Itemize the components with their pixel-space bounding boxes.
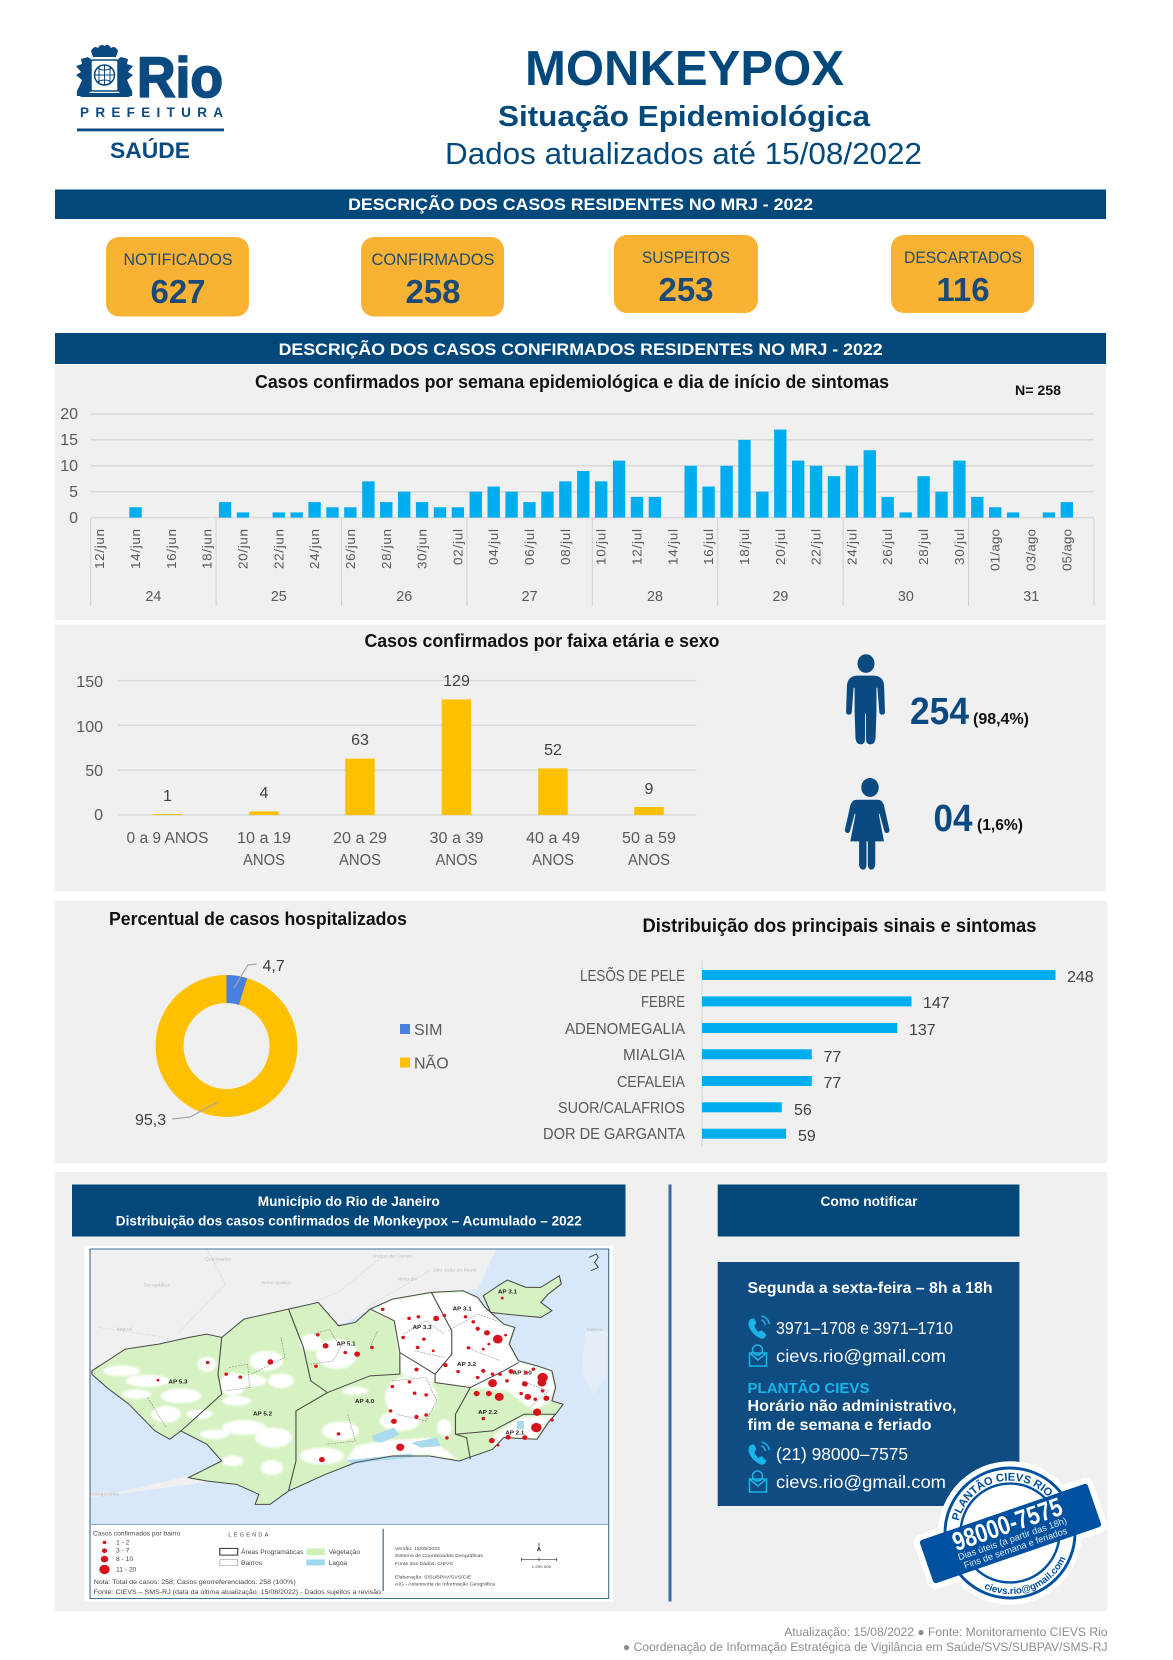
x axis day labels: 26/jun: [343, 529, 358, 569]
male count: 254: [910, 691, 969, 733]
category labels: 20 a 29: [333, 830, 387, 847]
panel: hospitalization and symptoms: [55, 901, 1107, 1163]
category labels: 0 a 9 ANOS: [126, 830, 208, 847]
stamp: plantão CIEVS: 98000-7575: [948, 1491, 1066, 1557]
map legend: Vegetação: [329, 1549, 361, 1556]
x axis day labels: 10/jul: [594, 529, 609, 565]
title: Situação Epidemiológica: [498, 101, 871, 133]
area labels: AP 3.1: [498, 1290, 518, 1296]
x axis week labels: 26: [396, 589, 412, 605]
stamp: plantão CIEVS: Fins de semana e feriados: [963, 1526, 1069, 1570]
area labels: AP 3.2: [457, 1362, 477, 1368]
value labels: 129: [443, 673, 470, 690]
map of Rio de Janeiro with case bubbles: Itaguaí: [117, 1327, 133, 1332]
footer: [623, 1625, 1108, 1654]
x axis week labels: 30: [898, 589, 914, 605]
icon: city crest: [76, 45, 133, 97]
category labels: ANOS: [628, 852, 670, 869]
donut chart: [135, 958, 285, 1129]
x axis week labels: 25: [271, 589, 287, 605]
category labels: 10 a 19: [237, 830, 291, 847]
x axis day labels: 14/jul: [665, 529, 680, 565]
map legend: Casos confirmados por bairro: [93, 1531, 181, 1538]
symptom values: 56: [794, 1102, 812, 1119]
y axis labels: 15: [60, 432, 78, 449]
y axis labels: 0: [94, 807, 103, 824]
card: notificados: NOTIFICADOS: [124, 250, 232, 269]
x axis day labels: 12/jul: [630, 529, 644, 565]
stamp: plantão CIEVS: cievs.rio@gmail.com: [984, 1557, 1066, 1594]
title: Dados atualizados até 15/08/2022: [445, 136, 922, 171]
icon: female figure: [845, 778, 889, 870]
bars: cases per day: [129, 430, 1073, 518]
footer: Atualização: 15/08/2022 ● Fonte: Monitoramento CIEVS Rio: [784, 1625, 1108, 1639]
donut legend: NÃO: [414, 1052, 449, 1072]
area labels: [168, 1290, 533, 1436]
sample size: N= 258: [1015, 382, 1061, 398]
card: notificados: 627: [150, 273, 206, 310]
heading: como notificar: [718, 1184, 1019, 1236]
x axis week labels: 24: [145, 589, 161, 605]
x axis day labels: 30/jun: [415, 529, 430, 569]
map legend: 3 - 7: [116, 1548, 130, 1555]
area labels: AP 2.1: [505, 1431, 525, 1436]
area labels: AP 5.2: [253, 1412, 273, 1417]
contact box: fim de semana e feriado: [748, 1417, 932, 1434]
value labels: 63: [351, 732, 369, 749]
card: suspeitos: SUSPEITOS: [642, 248, 730, 267]
heading: como notificar: Como notificar: [820, 1193, 918, 1209]
x axis day labels: 24/jun: [307, 529, 322, 569]
value labels: 4: [260, 785, 269, 802]
lagoons: [346, 1421, 524, 1464]
value labels: [163, 673, 654, 805]
office hours: Segunda a sexta-feira – 8h a 18h: [748, 1280, 992, 1297]
x axis day labels: 04/jul: [486, 529, 501, 565]
card: descartados: DESCARTADOS: [904, 248, 1022, 267]
plantão email: cievs.rio@gmail.com: [776, 1472, 946, 1492]
x axis day labels: 16/jun: [164, 529, 179, 569]
symptom values: [794, 969, 1094, 1145]
card: descartados: [891, 235, 1034, 313]
x axis day labels: 14/jun: [128, 529, 143, 569]
x axis day labels: 20/jul: [773, 529, 788, 565]
x axis day labels: 28/jun: [379, 529, 394, 569]
map of Rio de Janeiro with case bubbles: Queimados: [205, 1257, 232, 1263]
urban areas: [103, 1292, 555, 1475]
contact box: [718, 1262, 1019, 1506]
municipality base: [92, 1291, 563, 1504]
area labels: AP 5.1: [336, 1342, 356, 1347]
heading bar: casos confirmados: [55, 333, 1106, 364]
x axis day labels: [92, 529, 1074, 571]
card: descartados: 116: [936, 271, 990, 308]
programme area boundaries: [92, 1291, 563, 1504]
category labels: ANOS: [436, 852, 478, 869]
case bubbles: [156, 1297, 554, 1462]
title: MONKEYPOX: [525, 42, 844, 96]
wordmark Rio: Rio: [137, 46, 223, 110]
area labels: AP 3.3: [413, 1325, 432, 1331]
divider: [668, 1184, 672, 1602]
map of Rio de Janeiro with case bubbles: Duque de Caxias: [372, 1254, 413, 1259]
x axis day labels: 18/jul: [737, 529, 752, 565]
area labels: AP 2.2: [478, 1410, 498, 1416]
map of Rio de Janeiro with case bubbles: São João de Meriti: [433, 1268, 476, 1273]
map legend: Áreas Programáticas: [241, 1547, 303, 1556]
neighbourhood boundaries: [148, 1314, 548, 1444]
female count: 04: [934, 798, 972, 840]
donut legend: [400, 1022, 449, 1072]
plantão phone: (21) 98000–7575: [776, 1444, 908, 1464]
map legend: 8 - 10: [116, 1556, 134, 1563]
symptom labels: FEBRE: [641, 994, 685, 1011]
category labels: ANOS: [243, 852, 285, 869]
card: confirmados: [361, 237, 504, 316]
map legend: Lagoa: [329, 1560, 348, 1567]
x axis day labels: 30/jul: [952, 529, 967, 565]
category labels: 50 a 59: [622, 830, 676, 847]
card: confirmados: CONFIRMADOS: [372, 250, 494, 269]
chart title: hospitalized: Percentual de casos hospitalizados: [109, 908, 407, 929]
plantão heading: PLANTÃO CIEVS: [748, 1379, 870, 1397]
map of Rio de Janeiro with case bubbles: Nilópolis: [397, 1277, 418, 1283]
map legend: 1:250.000: [532, 1564, 552, 1569]
map legend: 1 - 2: [116, 1540, 130, 1546]
x axis week labels: 29: [772, 589, 788, 605]
stamp: plantão CIEVS: [914, 1461, 1107, 1604]
chart title: Casos confirmados por semana epidemiológica e dia de início de sintomas: [255, 372, 889, 392]
x axis day labels: 22/jul: [809, 529, 824, 565]
category labels: ANOS: [339, 852, 381, 869]
symptom values: 147: [923, 995, 950, 1012]
map legend: Fonte dos Dados: CIEVS: [395, 1561, 454, 1567]
x axis day labels: 02/jul: [450, 529, 465, 565]
icons: phone and mail: [749, 1316, 770, 1492]
value labels: 9: [645, 781, 654, 798]
icon: male figure: [846, 654, 885, 744]
map legend: Fonte: CIEVS – SMS-RJ (data da última atualização: 15/08/2022) - Dados sujeitos a revisão: [94, 1589, 381, 1596]
heading bar: casos residentes: [55, 190, 1106, 219]
x axis day labels: 01/ago: [988, 529, 1003, 571]
donut chart: 4,7: [262, 958, 285, 975]
x axis week labels: 28: [647, 589, 663, 605]
symptom labels: SUOR/CALAFRIOS: [558, 1100, 685, 1117]
x axis week labels: 31: [1023, 589, 1039, 605]
x axis day labels: 06/jul: [522, 529, 537, 565]
map legend: Versão: 15/08/2022: [395, 1546, 440, 1552]
x axis day labels: 28/jul: [916, 529, 931, 565]
y axis labels: 150: [76, 674, 103, 691]
stamp: plantão CIEVS: Dias úteis (a partir das 18h): [957, 1516, 1068, 1562]
map of Rio de Janeiro with case bubbles: Nova Iguaçu: [262, 1280, 291, 1286]
bars: age groups: [153, 699, 664, 815]
y axis labels: 5: [69, 484, 78, 501]
map legend: LEGENDA: [228, 1533, 271, 1538]
symptom labels: CEFALEIA: [617, 1074, 686, 1091]
area labels: AP 5.3: [168, 1380, 188, 1385]
map legend: [93, 1531, 557, 1596]
map legend: 11 - 20: [116, 1567, 137, 1573]
symptom labels: ADENOMEGALIA: [565, 1021, 686, 1038]
chart title: Casos confirmados por faixa etária e sexo: [364, 631, 720, 651]
heading bar: casos confirmados: DESCRIÇÃO DOS CASOS CONFIRMADOS RESIDENTES NO MRJ - 2022: [279, 339, 883, 359]
x axis day labels: 08/jul: [558, 529, 573, 565]
contact box: Horário não administrativo,: [748, 1398, 956, 1415]
map heading: Município do Rio de Janeiro: [258, 1193, 440, 1209]
map heading: Distribuição dos casos confirmados de Monkeypox – Acumulado – 2022: [116, 1212, 582, 1228]
stamp: plantão CIEVS: PLANTÃO CIEVS RIO: [952, 1472, 1052, 1520]
heading bar: casos residentes: DESCRIÇÃO DOS CASOS RESIDENTES NO MRJ - 2022: [348, 194, 813, 214]
map heading: [72, 1184, 626, 1236]
chart title: symptoms: Distribuição dos principais sinais e sintomas: [642, 915, 1037, 937]
x axis day labels: 12/jun: [92, 529, 107, 569]
footer: ● Coordenação de Informação Estratégica de Vigilância em Saúde/SVS/SUBPAV/SMS-RJ: [623, 1640, 1108, 1654]
x axis day labels: 24/jul: [844, 529, 859, 565]
map of Rio de Janeiro with case bubbles: Mangaratiba: [90, 1492, 120, 1497]
phone numbers: 3971–1708 e 3971–1710: [776, 1318, 953, 1338]
category labels: ANOS: [532, 852, 574, 869]
x axis day labels: 22/jun: [271, 529, 286, 569]
value labels: 1: [163, 788, 172, 805]
y axis labels: 100: [76, 719, 103, 736]
category labels: 30 a 39: [430, 830, 484, 847]
value labels: 52: [544, 742, 562, 759]
symptom labels: LESÕS DE PELE: [580, 968, 685, 985]
y axis labels: 20: [60, 406, 78, 423]
x axis week labels: 27: [522, 589, 538, 605]
logo: Prefeitura Rio Saúde: [76, 45, 224, 163]
card: suspeitos: 253: [658, 271, 714, 308]
map of Rio de Janeiro with case bubbles: Niterói: [587, 1327, 602, 1333]
panel: age and sex: [55, 624, 1106, 891]
panel: map and notification: [55, 1172, 1107, 1611]
area labels: AP 1.0: [513, 1371, 533, 1376]
bars: symptoms: [702, 970, 1056, 1139]
y axis labels: [76, 674, 103, 824]
area labels: AP 4.0: [355, 1399, 375, 1405]
symptom values: 77: [824, 1049, 841, 1066]
SAÚDE: SAÚDE: [110, 138, 190, 163]
category labels: [126, 830, 676, 869]
symptom labels: DOR DE GARGANTA: [543, 1126, 686, 1143]
title: [445, 42, 922, 171]
symptom values: 77: [824, 1075, 841, 1092]
map legend: Elaboração: S/SUBPAV/SVS/CIE: [395, 1575, 472, 1580]
map legend: Sistema de Coordenadas Geográficas: [395, 1553, 484, 1559]
panel: weekly epidemic curve: [55, 365, 1106, 620]
symptom values: 137: [909, 1022, 936, 1039]
card: confirmados: 258: [405, 273, 461, 310]
symptom labels: [543, 968, 686, 1143]
symptom values: 248: [1067, 969, 1094, 986]
x axis day labels: 05/ago: [1059, 529, 1074, 571]
x axis day labels: 16/jul: [701, 529, 716, 565]
map of Rio de Janeiro with case bubbles: [84, 1246, 613, 1602]
x axis day labels: 03/ago: [1024, 529, 1038, 571]
symptom labels: MIALGIA: [623, 1047, 686, 1064]
donut legend: SIM: [414, 1022, 442, 1039]
x axis day labels: 20/jun: [236, 529, 250, 569]
panel: age and sex: (98,4%): [973, 711, 1029, 728]
neighbouring land: [90, 1249, 496, 1498]
y axis labels: 50: [85, 763, 103, 780]
email: cievs.rio@gmail.com: [776, 1346, 946, 1366]
area labels: AP 3.1: [453, 1307, 472, 1313]
PREFEITURA: PREFEITURA: [80, 105, 223, 120]
map legend: Nota: Total de casos: 258; Casos georreferenciados: 258 (100%): [94, 1579, 296, 1586]
x axis day labels: 26/jul: [880, 529, 895, 565]
card: suspeitos: [614, 235, 758, 313]
y axis labels: [60, 406, 78, 527]
x axis week labels: [145, 589, 1039, 605]
card: notificados: [106, 237, 249, 316]
y axis labels: 0: [69, 510, 78, 527]
donut chart: 95,3: [135, 1112, 166, 1129]
x axis day labels: 18/jun: [200, 529, 215, 569]
map legend: AIG - Assessoria de Informação Geográfica: [395, 1582, 495, 1587]
y axis labels: 10: [60, 458, 78, 475]
symptom values: 59: [798, 1128, 816, 1145]
map of Rio de Janeiro with case bubbles: Seropédica: [144, 1283, 170, 1289]
category labels: 40 a 49: [526, 830, 580, 847]
map legend: Bairros: [241, 1560, 262, 1567]
panel: age and sex: (1,6%): [977, 817, 1023, 834]
